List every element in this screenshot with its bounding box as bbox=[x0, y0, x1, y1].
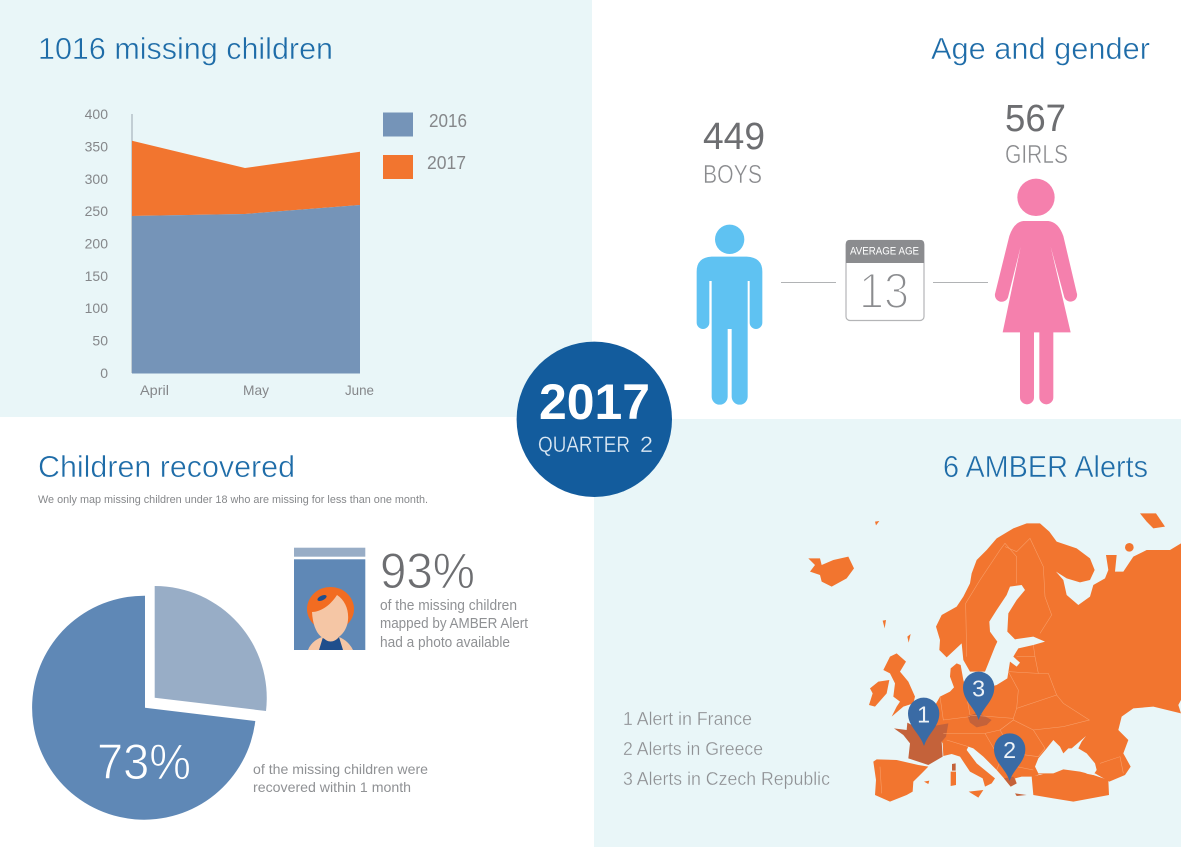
slice: remainder bbox=[155, 586, 267, 711]
panel: missing children bbox=[0, 0, 592, 417]
panel: age and gender bbox=[697, 31, 1150, 405]
center badge: 2017 quarter 2 bbox=[517, 342, 672, 497]
alert list bbox=[623, 708, 830, 789]
stat: 93% photo available: had a photo available bbox=[380, 635, 510, 651]
x axis labels: April bbox=[140, 382, 169, 398]
panel: amber alerts bbox=[594, 419, 1181, 847]
girls count: GIRLS bbox=[1005, 139, 1068, 169]
water bodies bbox=[1035, 736, 1097, 775]
x axis labels: June bbox=[345, 382, 374, 398]
highlighted countries bbox=[894, 713, 1017, 787]
girls count: 567 bbox=[1005, 98, 1066, 140]
area: 2017 bbox=[132, 141, 360, 216]
stat: 93% photo available: 93% bbox=[380, 543, 475, 599]
text: recovered within one month: of the missing children were bbox=[253, 761, 428, 777]
boys count: BOYS bbox=[703, 159, 762, 189]
text: recovered within one month: recovered within 1 month bbox=[253, 779, 411, 795]
pin 2: Greece bbox=[994, 733, 1025, 781]
connector lines bbox=[781, 282, 988, 284]
heading: 6 AMBER Alerts: 6 AMBER Alerts bbox=[943, 449, 1148, 484]
icon: missing child photo bbox=[294, 548, 365, 650]
y axis labels: 200 bbox=[85, 236, 108, 252]
y axis labels: 100 bbox=[85, 300, 108, 316]
icon: calendar average age: AVERAGE AGE bbox=[850, 246, 919, 258]
x axis labels bbox=[140, 382, 374, 398]
y axis labels: 0 bbox=[100, 365, 108, 381]
center badge: 2017 quarter 2: 2017 bbox=[539, 374, 650, 430]
pin 1: France: 1 bbox=[917, 701, 930, 727]
center badge: 2017 quarter 2: 2 bbox=[640, 432, 653, 457]
pie chart bbox=[32, 586, 267, 820]
y axis labels: 300 bbox=[85, 171, 108, 187]
pin 3: Czech Republic: 3 bbox=[972, 675, 985, 701]
legend: 2016 bbox=[429, 111, 467, 131]
area: 2016 bbox=[132, 205, 360, 374]
legend bbox=[383, 111, 467, 179]
stat: 93% photo available: mapped by AMBER Alert bbox=[380, 616, 528, 632]
stat: 93% photo available: of the missing children bbox=[380, 598, 517, 614]
pin 3: Czech Republic bbox=[963, 672, 994, 720]
y axis labels: 400 bbox=[85, 106, 108, 122]
heading: age and gender: Age and gender bbox=[931, 31, 1150, 66]
y axis labels: 50 bbox=[92, 332, 108, 348]
y axis labels bbox=[85, 106, 108, 381]
heading: 1016 missing children: 1016 missing children bbox=[38, 31, 333, 66]
alert list: 3 Alerts in Czech Republic bbox=[623, 768, 830, 789]
x axis labels: May bbox=[243, 382, 269, 398]
alert list: 2 Alerts in Greece bbox=[623, 738, 763, 759]
center badge: 2017 quarter 2: QUARTER bbox=[538, 432, 630, 457]
note: We only map missing children under 18 who are missing for less than one month. bbox=[38, 494, 428, 506]
slice: 73% recovered bbox=[32, 596, 255, 820]
pin 1: France bbox=[908, 698, 939, 746]
girls count bbox=[1005, 98, 1068, 169]
icon: boy bbox=[697, 225, 762, 405]
area chart bbox=[85, 106, 374, 398]
text: recovered within one month bbox=[253, 761, 428, 795]
country borders bbox=[880, 538, 1123, 793]
icon: calendar average age bbox=[846, 240, 924, 320]
icon: girl bbox=[995, 179, 1077, 404]
map of Europe bbox=[808, 513, 1181, 802]
value: 73%: 73% bbox=[97, 734, 191, 790]
legend: 2017 bbox=[427, 153, 466, 173]
pin 2: Greece: 2 bbox=[1003, 737, 1016, 763]
icon: calendar average age: 13 bbox=[859, 263, 909, 319]
y axis labels: 250 bbox=[85, 203, 108, 219]
boys count bbox=[703, 116, 765, 189]
y axis labels: 150 bbox=[85, 268, 108, 284]
boys count: 449 bbox=[703, 116, 765, 158]
panel: children recovered bbox=[32, 449, 528, 820]
heading: children recovered: Children recovered bbox=[38, 449, 295, 484]
y axis labels: 350 bbox=[85, 138, 108, 154]
land masses bbox=[808, 513, 1181, 802]
y axis bbox=[131, 114, 133, 373]
alert list: 1 Alert in France bbox=[623, 708, 752, 729]
stat: 93% photo available bbox=[380, 543, 528, 651]
